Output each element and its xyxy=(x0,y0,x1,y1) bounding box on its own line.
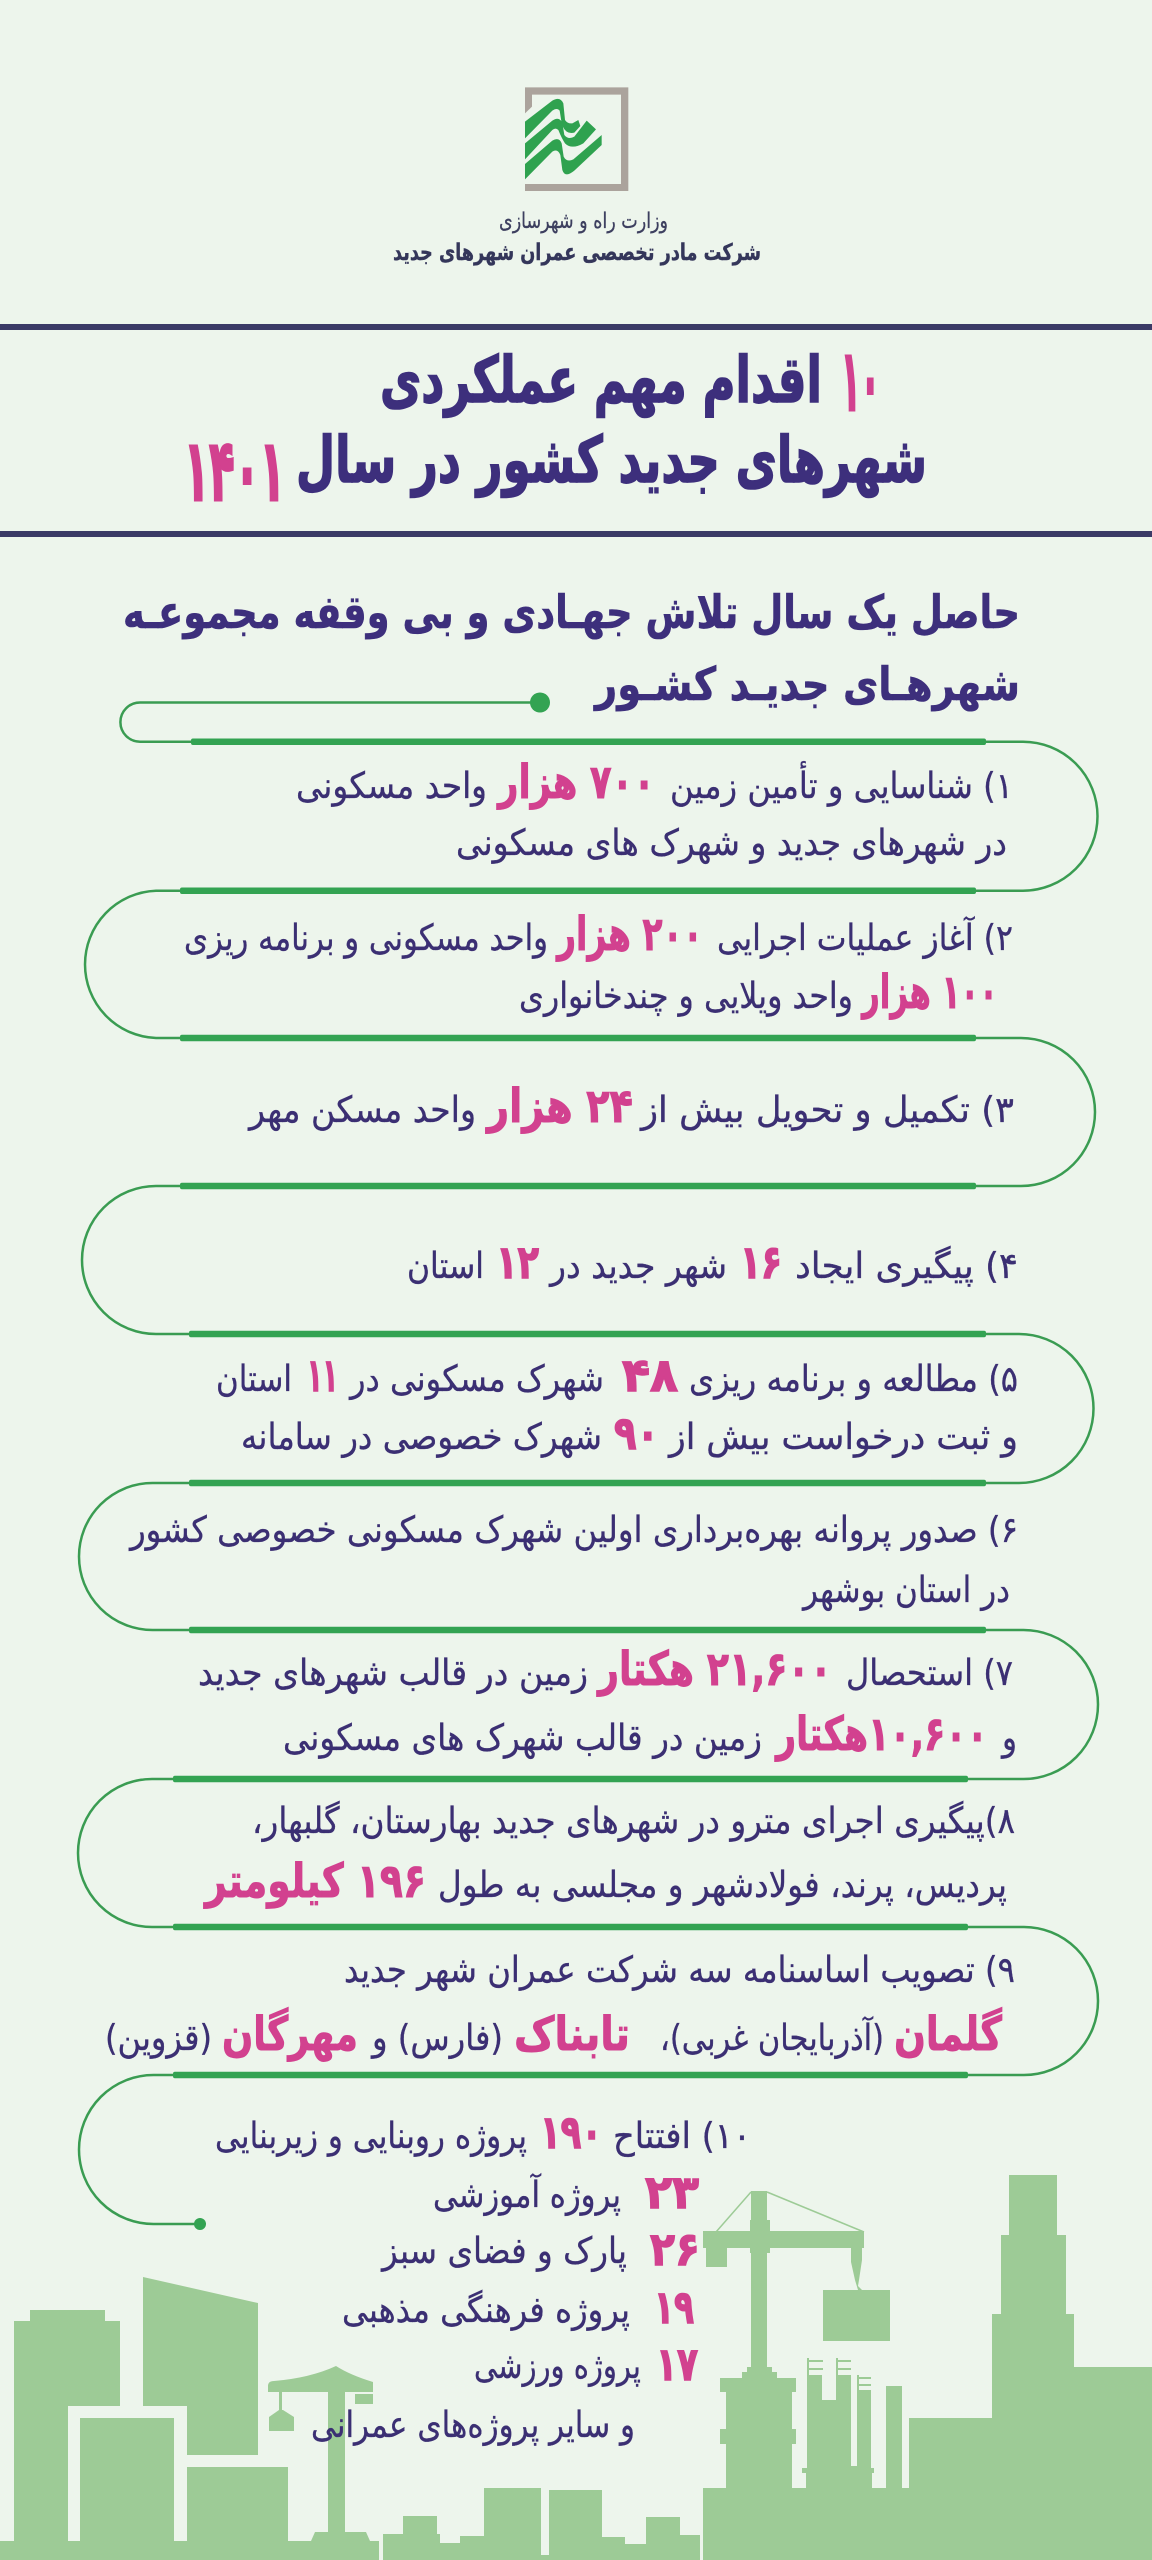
company name: شرکت مادر تخصصی عمران شهرهای جدید xyxy=(393,240,761,266)
item 10: ۱۷ xyxy=(656,2337,698,2391)
subtitle: شهرهـای جدیـد کشـور xyxy=(593,657,1020,711)
item 3: واحد مسکن مهر xyxy=(247,1090,476,1131)
item 2 xyxy=(184,907,1013,1020)
item 9: گلمان xyxy=(894,2007,1003,2062)
item 9 xyxy=(105,1950,1015,2062)
item 2: ۲) آغاز عملیات اجرایی xyxy=(717,915,1013,959)
item 1 xyxy=(296,755,1013,864)
item 5: ۹۰ xyxy=(614,1406,659,1460)
item 3 xyxy=(247,1079,1014,1134)
title: ۱۴۰۱ xyxy=(184,422,285,521)
item 5: شهرک مسکونی در xyxy=(348,1359,604,1400)
item 10: پروژه آموزشی xyxy=(433,2172,621,2216)
item 5: ۵) مطالعه و برنامه ریزی xyxy=(689,1359,1018,1400)
item 4 xyxy=(407,1235,1018,1289)
item 10: پارک و فضای سبز xyxy=(380,2231,627,2272)
item 10: ۱۹۰ xyxy=(540,2105,602,2159)
item 2: واحد مسکونی و برنامه ریزی xyxy=(184,918,548,959)
item 5: شهرک خصوصی در سامانه xyxy=(241,1417,602,1458)
item 7: و xyxy=(1000,1718,1017,1759)
item 10: پروژه ورزشی xyxy=(474,2346,641,2387)
item 5: ۱۱ xyxy=(307,1348,338,1402)
item 7: ۷) استحصال xyxy=(846,1653,1013,1694)
item 4: استان xyxy=(407,1246,484,1287)
item 4: ۱۶ xyxy=(740,1235,782,1289)
item 7 xyxy=(198,1642,1017,1762)
item 10: و سایر پروژه‌های عمرانی xyxy=(311,2405,635,2446)
item 4: ۴) پیگیری ایجاد xyxy=(795,1245,1018,1287)
item 10: ۲۳ xyxy=(645,2165,699,2219)
title: اقدام مهم عملکردی xyxy=(380,344,822,418)
item 10: پروژه فرهنگی مذهبی xyxy=(342,2289,630,2331)
item 10: ۱۹ xyxy=(654,2280,694,2334)
item 6: در استان بوشهر xyxy=(801,1570,1010,1611)
item 4: ۱۲ xyxy=(496,1235,539,1289)
ministry name: وزارت راه و شهرسازی xyxy=(499,209,668,234)
item 5: و ثبت درخواست بیش از xyxy=(667,1417,1018,1458)
item 5: ۴۸ xyxy=(622,1348,678,1402)
item 3: ۲۴ هزار xyxy=(485,1079,633,1134)
item 2: واحد ویلایی و چندخانواری xyxy=(519,976,853,1017)
item 6 xyxy=(128,1510,1018,1611)
item 7: زمین در قالب شهرک های مسکونی xyxy=(283,1718,762,1759)
item 1: واحد مسکونی xyxy=(296,766,487,807)
title: ۱۰ xyxy=(841,332,880,431)
skyline illustration xyxy=(0,2175,1152,2560)
title xyxy=(184,332,927,521)
item 2: ۱۰۰ هزار xyxy=(861,965,998,1020)
item 1: در شهرهای جدید و شهرک های مسکونی xyxy=(456,823,1007,864)
subtitle xyxy=(123,585,1020,711)
bottom title rule xyxy=(0,531,1152,537)
item 9: (قزوین) xyxy=(105,2018,212,2059)
item 8: پردیس، پرند، فولادشهر و مجلسی به طول xyxy=(438,1865,1007,1906)
item 6: ۶) صدور پروانه بهره‌برداری اولین شهرک مسکونی خصوصی کشور xyxy=(128,1510,1018,1551)
item 10: ۲۶ xyxy=(650,2222,700,2276)
item 9: (آذربایجان غربی)، xyxy=(660,2015,884,2059)
top title rule xyxy=(0,324,1152,330)
logo xyxy=(525,87,628,191)
item 9: مهرگان xyxy=(222,2007,358,2062)
item 10: ۱۰) افتتاح xyxy=(613,2116,751,2157)
item 7: ۱۰,۶۰۰هکتار xyxy=(775,1707,988,1762)
item 9: تابناک xyxy=(514,2007,630,2062)
item 1: ۱) شناسایی و تأمین زمین xyxy=(670,761,1013,807)
item 8: ۱۹۶ کیلومتر xyxy=(203,1854,426,1909)
item 8 xyxy=(203,1800,1015,1909)
item 7: زمین در قالب شهرهای جدید xyxy=(198,1653,588,1694)
item 7: ۲۱,۶۰۰ هکتار xyxy=(596,1642,832,1697)
item 10 xyxy=(215,2105,751,2446)
item 2: ۲۰۰ هزار xyxy=(556,907,703,962)
item 5: استان xyxy=(216,1359,292,1400)
item 10: پروژه روبنایی و زیربنایی xyxy=(215,2116,527,2157)
item 4: شهر جدید در xyxy=(548,1246,727,1287)
item 5 xyxy=(216,1348,1018,1460)
item 3: ۳) تکمیل و تحویل بیش از xyxy=(639,1090,1014,1131)
item 9: (فارس) و xyxy=(370,2018,503,2059)
item 9: ۹) تصویب اساسنامه سه شرکت عمران شهر جدید xyxy=(344,1950,1015,1991)
serpentine timeline xyxy=(78,692,1098,2230)
item 1: ۷۰۰ هزار xyxy=(496,755,655,810)
item 8: ۸)پیگیری اجرای مترو در شهرهای جدید بهارستان، گلبهار، xyxy=(252,1800,1015,1842)
